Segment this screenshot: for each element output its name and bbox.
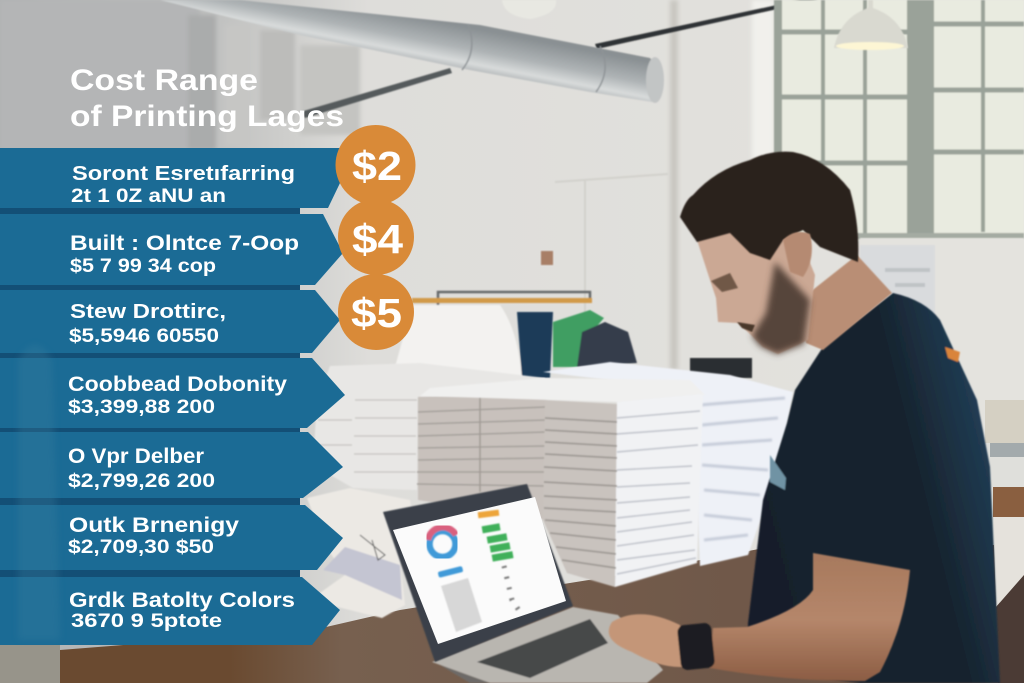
moustache: [737, 322, 755, 332]
table: [0, 400, 1024, 683]
laptop screen: [383, 484, 573, 662]
blue ribbon panel: [0, 148, 345, 645]
laptop: [383, 484, 663, 683]
price badge $2: [336, 125, 416, 205]
item labels: Soront Esretıfarring: [72, 163, 295, 185]
title: Cost Range: [70, 64, 258, 97]
item labels: $3,399,88 200: [68, 397, 215, 418]
front stack: [420, 378, 705, 587]
bar 2: [0, 214, 343, 285]
bar 6: [0, 505, 343, 570]
screen bars and table: [438, 510, 522, 632]
item labels: O Vpr Delber: [68, 445, 204, 468]
t-shirt: [748, 293, 1000, 683]
pendant lamps: [502, 0, 908, 50]
item labels: Grdk Batolty Colors: [69, 589, 295, 612]
item labels: Outk Brnenigy: [69, 514, 239, 537]
back right stack: [543, 362, 793, 566]
item labels: Built : Olntce 7-Oop: [70, 232, 299, 255]
price badge $5: [338, 274, 414, 350]
blurred figure in ribbon: [18, 345, 60, 640]
back wall with poster: [860, 238, 1024, 428]
title: [70, 64, 344, 133]
beard: [752, 262, 810, 354]
item labels: 3670 9 5ptote: [71, 611, 222, 632]
ear: [783, 232, 812, 277]
price badge $5: $5: [351, 290, 402, 336]
stacks of folded white shirts: [307, 362, 793, 618]
item labels: $2,709,30 $50: [68, 537, 214, 558]
bar 3: [0, 290, 340, 353]
price badge $2: $2: [352, 143, 402, 189]
item labels: [68, 163, 299, 632]
item labels: $5 7 99 34 cop: [70, 256, 216, 277]
bar 1: [0, 148, 340, 208]
middle beige stack: [417, 392, 547, 520]
bar 7: [0, 577, 340, 645]
man: [609, 152, 1000, 683]
darker gaps: [0, 150, 300, 644]
hair: [680, 152, 858, 262]
bar 5: [0, 432, 343, 498]
item labels: $2,799,26 200: [68, 471, 215, 492]
far left stack: [313, 363, 545, 490]
neck: [800, 255, 892, 350]
cloth bag in front: [307, 488, 415, 618]
forearm and hand: [609, 553, 910, 681]
price badge $4: $4: [352, 216, 403, 262]
clothes rack: [392, 292, 637, 378]
item labels: Stew Drottirc,: [70, 301, 226, 323]
item labels: Coobbead Dobonity: [68, 373, 287, 396]
item labels: $5,5946 60550: [69, 326, 219, 347]
face: [697, 190, 815, 354]
title: of Printing Lages: [70, 100, 344, 133]
price badge $4: [338, 199, 414, 275]
screen donut chart: [428, 527, 456, 557]
windows: [774, 0, 1024, 239]
item labels: 2t 1 0Z aNU an: [71, 186, 226, 207]
bar 4: [0, 358, 345, 428]
laptop base and keyboard: [432, 607, 663, 683]
air duct: [160, 0, 664, 103]
eye: [711, 273, 738, 292]
